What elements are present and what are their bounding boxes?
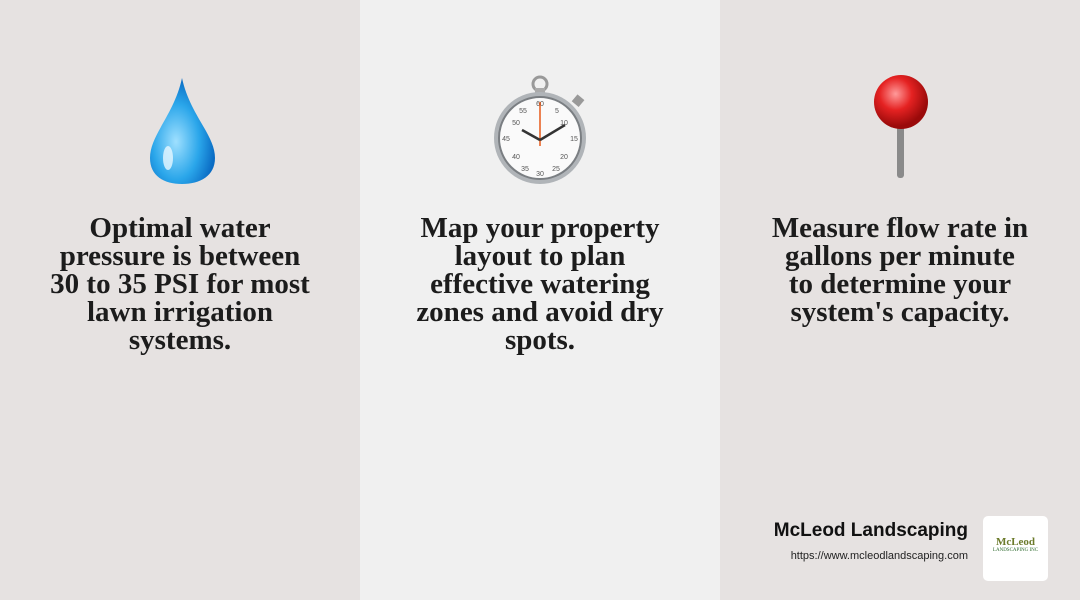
text: map: Map your property [420,212,659,244]
icon: stopwatch: 50 [512,120,520,127]
footer: brand [774,516,1048,581]
text: flow rate: gallons per minute [785,240,1015,272]
text: flow rate: Measure flow rate in [772,212,1028,244]
text: pressure: pressure is between [60,240,300,272]
panel: map layout [360,0,720,600]
icon: stopwatch: 60 [536,101,544,108]
text: flow rate [772,212,1028,328]
text: pressure: lawn irrigation [87,296,273,328]
text: map [416,212,664,356]
logo [983,516,1048,581]
icon: stopwatch: 35 [521,166,529,173]
text: flow rate: to determine your [789,268,1011,300]
text: pressure: systems. [129,324,231,356]
icon: stopwatch [494,76,586,184]
url: https://www.mcleodlandscaping.com [791,550,968,562]
logo: LANDSCAPING INC [993,548,1038,553]
logo: McLeod [996,536,1035,548]
panel: flow rate [720,0,1080,600]
text: pressure: Optimal water [89,212,271,244]
text: map: effective watering [430,268,650,300]
icon: stopwatch: 15 [570,136,578,143]
icon: stopwatch: 10 [560,120,568,127]
panel: water pressure [0,0,360,600]
text: map: layout to plan [455,240,625,272]
icon: pushpin [874,75,928,178]
text: pressure: 30 to 35 PSI for most [50,268,310,300]
icon: stopwatch: 45 [502,136,510,143]
icon: water drop [150,78,215,184]
icon: stopwatch: 55 [519,108,527,115]
brand name: McLeod Landscaping [774,520,968,541]
text: map: zones and avoid dry [416,296,664,328]
icon: stopwatch: 20 [560,154,568,161]
text: flow rate: system's capacity. [790,296,1010,328]
icon: stopwatch: 25 [552,166,560,173]
icon: stopwatch: 5 [555,108,559,115]
icon: stopwatch: 30 [536,171,544,178]
text: pressure [50,212,310,356]
text: map: spots. [505,324,575,356]
icon: stopwatch: 40 [512,154,520,161]
